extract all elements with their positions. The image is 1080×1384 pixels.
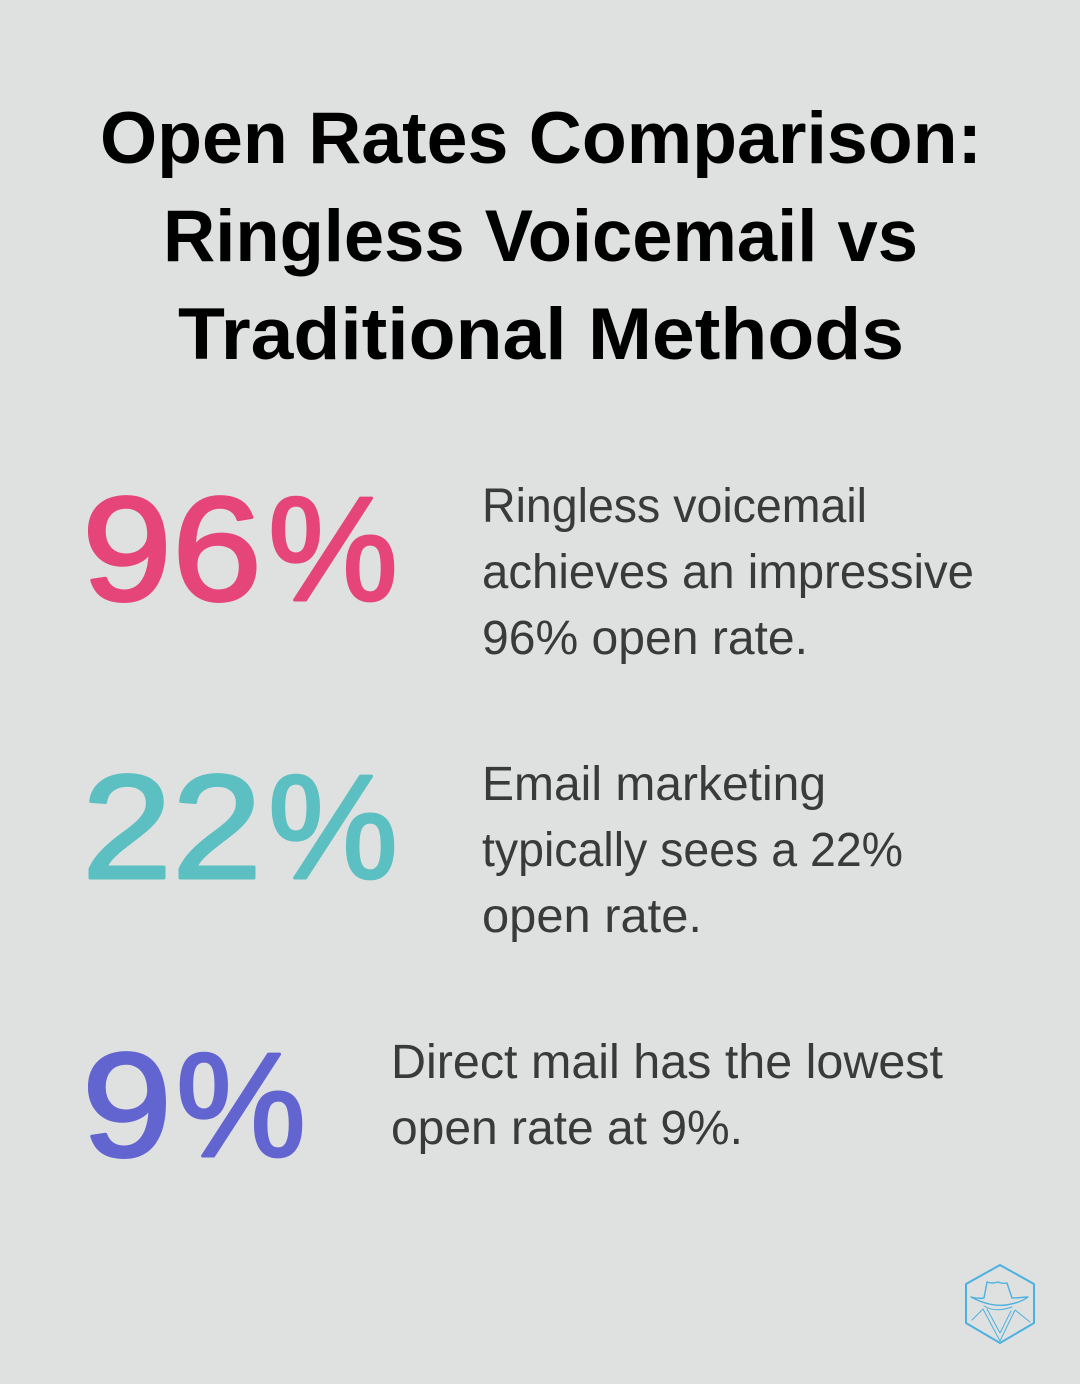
- stat: 9% direct mail: [82, 1023, 943, 1188]
- title: Traditional Methods: [178, 294, 904, 375]
- description: email marketing: [482, 758, 903, 943]
- number: 96%: [82, 467, 398, 632]
- number: 96%: %: [268, 467, 398, 632]
- description: ringless voicemail: achieves an impressive: [482, 546, 974, 599]
- description: direct mail: [391, 1036, 943, 1155]
- description: ringless voicemail: 96% open rate.: [482, 612, 808, 665]
- title: Open Rates Comparison:: [100, 98, 982, 179]
- description: ringless voicemail: [482, 480, 974, 665]
- stat: 22% email marketing: [82, 745, 903, 943]
- description: email marketing: open rate.: [482, 890, 702, 943]
- number: 96%: 96: [82, 467, 262, 632]
- title: [100, 98, 982, 375]
- number: 9%: 9: [82, 1023, 172, 1188]
- description: direct mail: open rate at 9%.: [391, 1102, 743, 1155]
- number: 22%: 22: [82, 745, 262, 910]
- number: 9%: [82, 1023, 306, 1188]
- number: 22%: %: [268, 745, 398, 910]
- description: direct mail: Direct mail has the lowest: [391, 1036, 943, 1089]
- number: 9%: %: [176, 1023, 306, 1188]
- number: 22%: [82, 745, 398, 910]
- icon: hexagon logo with hat: [966, 1265, 1034, 1343]
- description: email marketing: typically sees a 22%: [482, 824, 903, 877]
- description: email marketing: Email marketing: [482, 758, 826, 811]
- description: ringless voicemail: Ringless voicemail: [482, 480, 867, 533]
- title: Ringless Voicemail vs: [163, 196, 918, 277]
- stat: 96% ringless voicemail: [82, 467, 974, 665]
